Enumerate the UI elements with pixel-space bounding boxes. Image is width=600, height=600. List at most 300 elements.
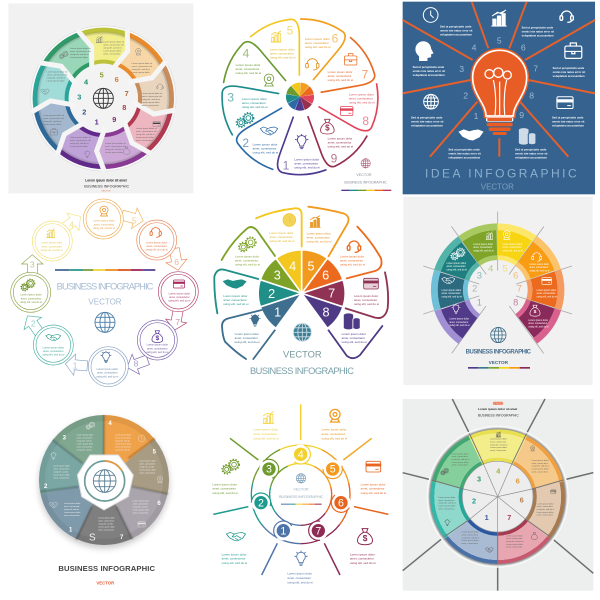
slice captions: amet, consectetur [77, 437, 93, 440]
segment captions: Lorem ipsum dolor [105, 151, 123, 154]
petal captions [236, 37, 375, 170]
numbers: 5 [497, 35, 502, 45]
circle captions: using elit, sed do ei [41, 248, 63, 252]
circle captions: Lorem ipsum dolor [43, 345, 64, 349]
hub numbers: 4 [488, 264, 493, 274]
numbers: 1 [474, 111, 479, 121]
slice captions: Lorem ipsum dolor [139, 469, 156, 472]
segment captions: amet, consectetur [438, 507, 455, 510]
segment captions: using elit, sed do ei [528, 325, 549, 328]
fan numbers: 3 [274, 269, 281, 283]
icon: globe [361, 159, 370, 168]
segment captions: using elit, sed do ei [136, 133, 155, 136]
segment captions: Lorem ipsum dolor [447, 262, 467, 265]
captions: Sed ut perspiciatis unde [553, 66, 585, 70]
petal numbers: 9 [331, 152, 338, 166]
arrow numbers: 6 [174, 257, 179, 267]
captions [411, 24, 585, 160]
segment captions: using elit, sed do ei [438, 502, 456, 505]
captions: omnis iste natus error sit [515, 152, 548, 156]
slice captions: Lorem ipsum dolor [77, 434, 93, 437]
slice captions: using elit, sed do [115, 440, 131, 443]
captions: using elit, sed do ei [223, 302, 249, 306]
outer rims [409, 202, 586, 378]
slice numbers: 1 [69, 527, 73, 533]
segment captions: Lorem ipsum dolor [462, 531, 479, 534]
petal captions: Lorem ipsum dolor [242, 97, 267, 101]
petal captions: using elit, sed do ei [242, 105, 268, 109]
captions: omnis iste natus error sit [553, 70, 585, 74]
circle captions: Lorem ipsum dolor [20, 293, 42, 297]
segment captions: using elit, sed do ei [70, 142, 89, 145]
segment captions: amet, consectetur [103, 53, 121, 56]
segment captions: Lorem ipsum dolor [537, 502, 554, 505]
slice numbers: 2 [44, 484, 48, 490]
slice captions: amet, consectetur [133, 512, 149, 515]
slice shadows [41, 415, 168, 540]
captions: using elit, sed do ei [322, 436, 348, 440]
numbers: 6 [521, 43, 526, 53]
segment icons [441, 431, 556, 552]
petal captions: amet, consectetur [305, 41, 329, 45]
outer ring [231, 425, 370, 564]
segment captions: amet, consectetur elit [47, 73, 68, 76]
captions: Sed ut perspiciatis unde [440, 24, 472, 28]
slice captions: Lorem ipsum dolor [133, 500, 149, 503]
icon: globe [491, 327, 506, 343]
segment captions: Lorem ipsum dolor sit [43, 114, 64, 117]
fan numbers: 1 [274, 305, 281, 319]
captions: omnis iste natus error sit [411, 119, 444, 123]
captions: using elit, sed do ei [361, 491, 387, 495]
segment captions: using elit, sed do ei [537, 295, 557, 298]
"$" on money bag: $ [363, 533, 368, 543]
captions: omnis iste natus error sit [552, 120, 585, 124]
slice captions: using elit, sed do [77, 440, 92, 443]
segment captions: Lorem ipsum dolor [490, 438, 507, 441]
hub numbers: 6 [513, 270, 518, 280]
captions: omnis iste natus error sit [440, 28, 473, 32]
slice captions: Lorem ipsum dolor [98, 516, 115, 519]
segment captions: Lorem ipsum dolor [462, 539, 479, 542]
outer radial lines [423, 212, 572, 353]
hub numbers: 1 [95, 117, 99, 126]
radial spokes [213, 404, 388, 575]
inner rims [453, 245, 543, 335]
segment captions: Lorem ipsum dolor sit [105, 142, 126, 145]
circle captions: using elit, sed do ei [168, 299, 191, 303]
petal captions: Lorem ipsum dolor [294, 158, 319, 162]
circles [11, 199, 198, 387]
segment captions: amet, consectetur [462, 542, 478, 545]
panel: eight-slice fan with petals [214, 207, 388, 376]
icon: globe [93, 470, 116, 492]
slice captions: amet, consectetur [64, 505, 80, 508]
segment captions: amet, consectetur [506, 537, 523, 540]
segment captions: amet, consectetur elit [43, 117, 64, 120]
wheel slices [58, 434, 150, 526]
wedge gaps [259, 248, 344, 330]
captions: Lorem ipsum dolor [322, 428, 346, 432]
numbers [459, 35, 538, 121]
petal numbers: 4 [243, 47, 250, 61]
slice numbers: 7 [120, 535, 124, 541]
slice captions: using elit, sed do [98, 522, 114, 525]
petal captions: Lorem ipsum dolor [236, 63, 260, 67]
petal captions: using elit, sed do ei [349, 101, 375, 105]
panel background [8, 3, 193, 193]
petal numbers: 1 [283, 158, 290, 172]
fan wedges [272, 264, 331, 323]
captions: Lorem ipsum dolor [350, 552, 375, 556]
segment captions: amet, consectetur [537, 514, 553, 517]
subtitle: VECTOR [96, 580, 115, 585]
icon: globe [296, 474, 306, 483]
subtitle: VECTOR [283, 350, 322, 360]
segment captions: using elit, sed do ei [532, 465, 550, 468]
rainbow bar [55, 269, 155, 271]
fan numbers: 4 [289, 259, 296, 273]
hub numbers: 5 [100, 71, 104, 80]
slice captions [53, 434, 156, 531]
panel caption [84, 178, 129, 193]
captions: Lorem ipsum dolor [340, 254, 364, 258]
segment captions: Lorem ipsum dolor sit [132, 62, 153, 65]
slice captions: Lorem ipsum dolor [139, 460, 156, 463]
panel: gray nine-segment wheel [7, 2, 200, 195]
title: BUSINESS INFOGRAPHIC [250, 366, 354, 376]
"$" on money bag: $ [155, 335, 159, 342]
panel caption: VECTOR [356, 173, 372, 177]
segment captions: using elit, sed do ei [447, 268, 467, 271]
vector tag: VECTOR [493, 403, 503, 405]
panel caption: VECTOR [102, 191, 111, 193]
subtitle: VECTOR [88, 297, 122, 306]
segment captions: Lorem ipsum dolor sit [70, 47, 91, 50]
circle captions: using elit, sed do ei [20, 300, 42, 304]
captions: amet, consectetur [253, 432, 277, 436]
slice captions: Lorem ipsum dolor [77, 443, 93, 446]
hub cover [478, 271, 517, 309]
petal numbers: 8 [362, 114, 369, 128]
captions: Lorem ipsum dolor [222, 552, 246, 556]
panel: seven-slice muted wheel [39, 415, 169, 585]
panel caption: Lorem ipsum dolor sit amet [85, 178, 128, 182]
panel: pastel ring with gray spokes [403, 399, 593, 591]
petal captions: using elit, sed do ei [305, 45, 331, 49]
segment captions: amet, consectetur elit [105, 145, 126, 148]
segment captions: amet, consectetur [452, 455, 468, 458]
subtitle: VECTOR [489, 360, 509, 365]
segment captions: amet, consectetur [442, 292, 461, 295]
hub numbers: 1 [485, 513, 489, 522]
number badges [251, 442, 354, 544]
panel background [403, 197, 593, 385]
circle captions: Lorem ipsum dolor [97, 367, 118, 371]
hub numbers: 6 [520, 496, 524, 505]
slice captions: amet, consectetur [64, 514, 80, 517]
segment captions: using elit, sed do ei [43, 120, 62, 123]
numbers: 7 [533, 63, 538, 73]
petal icons [236, 31, 357, 149]
icons [222, 409, 381, 565]
petal captions: using elit, sed do ei [294, 166, 320, 170]
petal captions: using elit, sed do ei [328, 144, 354, 148]
badge numbers: 6 [338, 497, 344, 509]
title: BUSINESS INFOGRAPHIC [478, 414, 519, 418]
captions: voluptatem accusantium [522, 33, 554, 37]
segment captions: Lorem ipsum dolor sit [136, 127, 157, 130]
captions: using elit, sed do ei [269, 239, 295, 243]
rainbow bar [341, 190, 391, 191]
petal captions: Lorem ipsum dolor [270, 48, 295, 52]
slice captions: Lorem ipsum dolor [115, 434, 132, 437]
segment captions: using elit, sed do ei [70, 53, 89, 56]
arrow numbers: 5 [132, 215, 137, 225]
slice captions: Lorem ipsum dolor [64, 502, 81, 505]
ring halo [427, 426, 568, 567]
segment captions: using elit, sed do ei [462, 536, 480, 539]
circle captions: Lorem ipsum dolor [146, 240, 167, 244]
petal captions: amet, consectetur [236, 67, 259, 71]
numbers: 2 [463, 91, 468, 101]
captions: amet, consectetur [361, 487, 384, 491]
petal numbers: 3 [227, 91, 234, 105]
captions: using elit, sed do ei [354, 302, 379, 306]
segment captions: Lorem ipsum dolor [132, 71, 150, 74]
petal captions: using elit, sed do ei [236, 71, 262, 75]
segment captions: Lorem ipsum dolor [438, 504, 456, 507]
numbers: 9 [519, 110, 524, 120]
segment captions: amet, consectetur [473, 246, 492, 249]
captions: Lorem ipsum dolor [342, 332, 366, 336]
hub numbers: 7 [507, 513, 511, 522]
segment captions: Lorem ipsum dolor [70, 56, 88, 59]
petal numbers: 6 [332, 32, 339, 46]
petal numbers [227, 23, 369, 172]
segment bodies [432, 224, 564, 356]
captions: using elit, sed do ei [340, 262, 365, 266]
strong outer rim [406, 405, 589, 588]
segment captions: Lorem ipsum dolor sit [103, 41, 124, 44]
captions: Lorem ipsum dolor [354, 294, 378, 298]
petal captions: amet, consectetur [349, 97, 373, 101]
segment captions: amet, consectetur [503, 246, 522, 249]
circle captions [20, 219, 191, 378]
slice captions: using elit, sed do [115, 449, 131, 452]
badge numbers: 3 [266, 464, 272, 476]
captions: using elit, sed do ei [253, 436, 279, 440]
captions: Lorem ipsum dolor [235, 254, 259, 258]
segment captions: amet, consectetur [506, 546, 523, 549]
title: BUSINESS INFOGRAPHIC [57, 282, 154, 292]
hub numbers: 8 [122, 103, 126, 112]
hub numbers [77, 71, 129, 126]
segment captions: Lorem ipsum dolor [142, 101, 160, 104]
captions: amet, consectetur [212, 487, 236, 491]
segment captions: Lorem ipsum dolor [47, 79, 65, 82]
petal captions: amet, consectetur [328, 74, 351, 78]
petal captions: Lorem ipsum dolor [328, 70, 352, 74]
segment captions: using elit, sed do ei [47, 76, 66, 79]
fan numbers: 6 [322, 269, 329, 283]
caption line: Lorem ipsum dolor sit amet [478, 407, 517, 411]
circle captions: using elit, sed do ei [146, 248, 168, 252]
slice captions: using elit, sed do [53, 470, 69, 473]
captions: Sed ut perspiciatis unde [413, 65, 445, 69]
panel background [403, 399, 593, 591]
white icons [416, 8, 582, 145]
petal captions: using elit, sed do ei [253, 150, 279, 154]
petal numbers: 5 [287, 23, 294, 37]
edge shading [42, 418, 166, 542]
badge fills [254, 448, 348, 537]
captions: amet, consectetur [342, 336, 365, 340]
hub numbers: 4 [84, 77, 89, 86]
captions: Sed ut perspiciatis unde [411, 115, 443, 119]
segment captions: amet, consectetur [532, 470, 548, 473]
captions: using elit, sed do ei [222, 561, 248, 565]
numbers: 4 [472, 43, 477, 53]
arrow numbers: 3 [30, 260, 35, 270]
captions: Sed ut perspiciatis unde [515, 148, 547, 152]
slice numbers: 3 [63, 436, 67, 442]
petal captions: amet, consectetur [294, 162, 318, 166]
segment captions: using elit, sed do ei [449, 324, 470, 327]
slice captions: amet, consectetur [139, 463, 155, 466]
soft shadow [39, 418, 169, 548]
captions: amet, consectetur [307, 236, 330, 240]
petal outlines [212, 6, 392, 186]
panel caption: BUSINESS INFOGRAPHIC [84, 185, 129, 189]
slice captions: amet, consectetur [77, 446, 93, 449]
fan numbers: 2 [268, 287, 275, 301]
segment captions: using elit, sed do ei [529, 269, 550, 272]
panel background [403, 2, 595, 194]
hub numbers: 3 [477, 475, 481, 484]
badge numbers: 4 [298, 449, 304, 461]
segment captions: Lorem ipsum dolor [537, 511, 554, 514]
segment captions: using elit, sed do ei [132, 68, 151, 71]
captions: using elit, sed do ei [235, 340, 260, 344]
slice captions: using elit, sed do [133, 506, 148, 509]
arrow numbers: 8 [134, 359, 139, 369]
icon: globe [93, 88, 113, 108]
hub numbers [472, 467, 524, 522]
segment captions: Lorem ipsum dolor [136, 136, 154, 139]
petal outlines [214, 207, 388, 359]
segment captions: Lorem ipsum dolor [532, 467, 549, 470]
captions: Lorem ipsum dolor [307, 232, 331, 236]
badge numbers [258, 449, 344, 537]
captions: amet, consectetur [223, 298, 247, 302]
hub numbers: 2 [472, 496, 476, 505]
captions: Lorem ipsum dolor [235, 332, 259, 336]
segment captions: Lorem ipsum dolor [70, 145, 88, 148]
petal numbers: 2 [242, 136, 249, 150]
hub numbers: 3 [477, 270, 482, 280]
segment captions: Lorem ipsum dolor [506, 534, 523, 537]
fan numbers [268, 259, 335, 319]
slice captions: amet, consectetur [53, 476, 69, 479]
orange rays [403, 2, 595, 157]
arrows [19, 205, 189, 377]
circle captions: using elit, sed do ei [42, 353, 65, 357]
badge numbers: 7 [315, 525, 321, 537]
arrow numbers: 1 [73, 360, 78, 370]
slice captions: using elit, sed do [139, 466, 155, 469]
captions: using elit, sed do ei [287, 580, 313, 584]
segment captions: using elit, sed do ei [503, 249, 523, 252]
petal captions: amet, consectetur [242, 101, 266, 105]
faint icons [49, 422, 163, 527]
slice captions: Lorem ipsum dolor [64, 511, 81, 514]
segment captions: Lorem ipsum dolor sit [142, 92, 163, 95]
circle captions: Lorem ipsum dolor [147, 343, 168, 347]
hub numbers: 1 [477, 298, 482, 308]
subtitle: VECTOR [481, 183, 514, 192]
captions: voluptatem accusantium [413, 73, 445, 77]
circle captions: amet, consectetur [147, 346, 168, 350]
segment captions: using elit, sed do ei [105, 148, 124, 151]
segment captions: using elit, sed do ei [537, 508, 555, 511]
captions: using elit, sed do ei [350, 561, 376, 565]
segment captions: amet, consectetur elit [136, 130, 157, 133]
captions: omnis iste natus error sit [448, 152, 481, 156]
circle captions: using elit, sed do ei [96, 374, 119, 378]
hub numbers: 6 [115, 75, 119, 84]
circle captions: amet, consectetur [43, 349, 64, 353]
segment captions: Lorem ipsum dolor [537, 289, 557, 292]
segment captions: amet, consectetur elit [70, 50, 91, 53]
title: BUSINESS INFOGRAPHIC [279, 494, 323, 499]
hub numbers: 7 [517, 284, 522, 294]
rainbow bar [468, 367, 530, 369]
circle captions: amet, consectetur [94, 222, 114, 226]
petal numbers: 7 [362, 67, 369, 81]
captions: amet, consectetur [269, 235, 293, 239]
captions: using elit, sed do ei [212, 491, 238, 495]
slice captions: using elit, sed do [64, 508, 80, 511]
hub numbers [472, 264, 522, 308]
panel: idea infographic light bulb [403, 2, 595, 194]
captions: amet, consectetur [235, 336, 258, 340]
hub numbers: 9 [112, 115, 116, 124]
hub numbers: 7 [125, 89, 129, 98]
badge numbers: 2 [258, 497, 264, 509]
arrow numbers [30, 215, 180, 370]
rainbow bar [281, 503, 322, 506]
hub numbers: 8 [513, 298, 518, 308]
slice captions: Lorem ipsum dolor [133, 509, 149, 512]
segment captions [438, 438, 555, 549]
petal captions: amet, consectetur [253, 146, 276, 150]
fan numbers: 8 [322, 305, 330, 319]
captions: amet, consectetur [287, 576, 311, 580]
segment captions [43, 41, 163, 154]
circle captions: amet, consectetur [169, 295, 190, 299]
arrow numbers: 4 [69, 219, 74, 229]
segment icons [41, 36, 163, 158]
segment captions: amet, consectetur elit [142, 95, 163, 98]
segment captions: amet, consectetur [449, 321, 468, 324]
panel: circle chain with arrows [11, 199, 198, 387]
slice captions: Lorem ipsum dolor [115, 443, 132, 446]
hub numbers: 3 [77, 92, 81, 101]
segment captions: amet, consectetur [537, 505, 553, 508]
captions: Sed ut perspiciatis unde [522, 25, 554, 29]
petal captions: Lorem ipsum dolor [305, 37, 330, 41]
